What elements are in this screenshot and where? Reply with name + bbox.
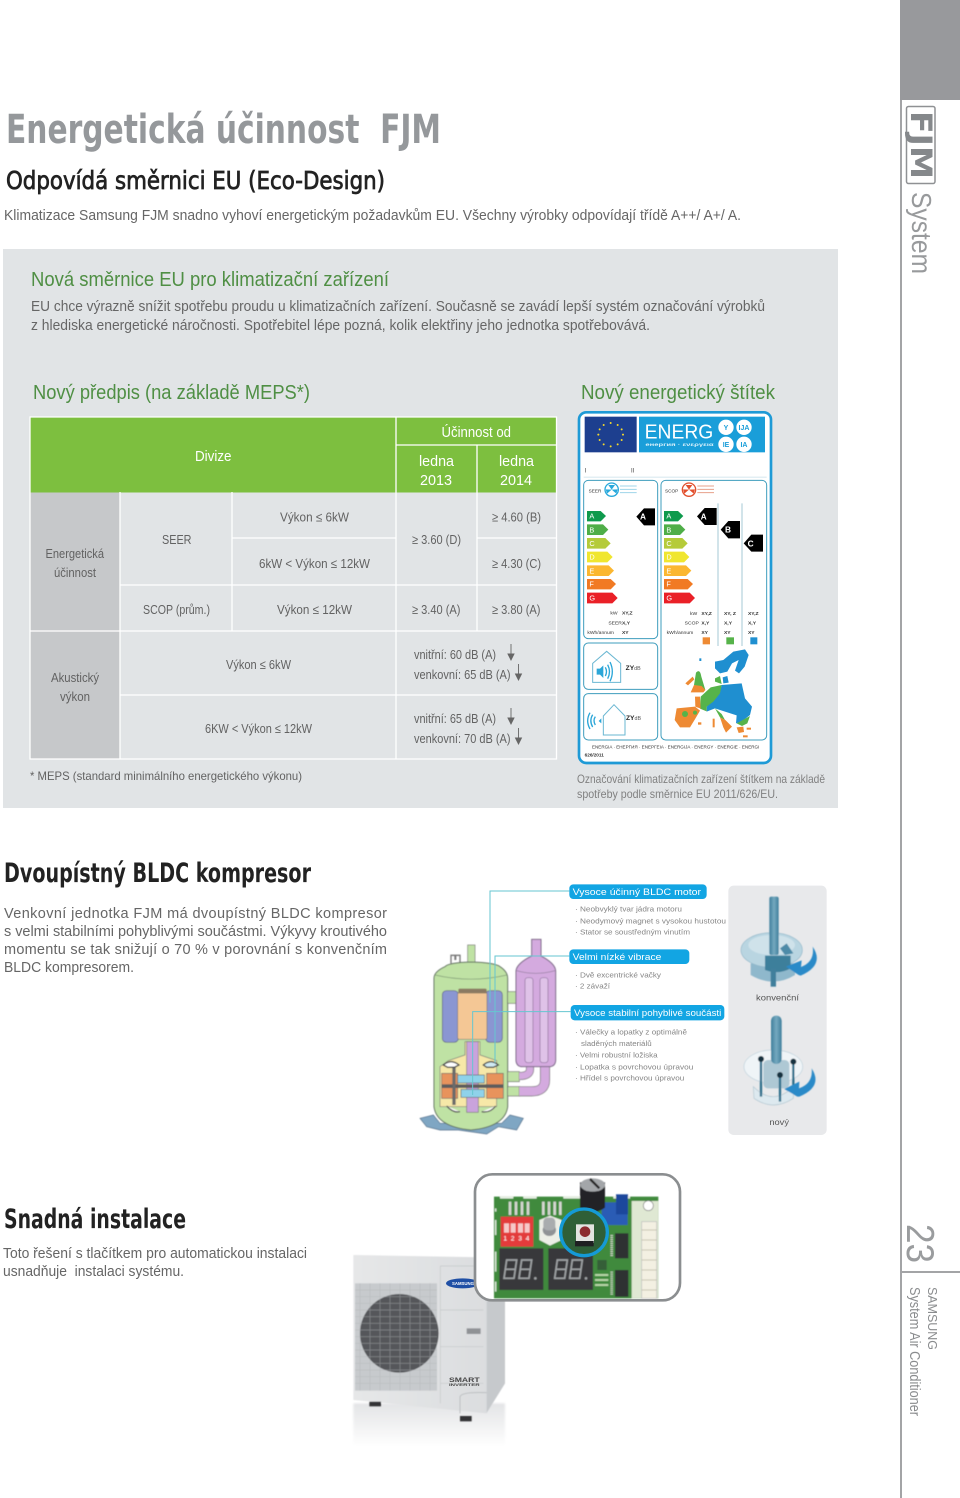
scop header icon: SCOP	[665, 489, 678, 494]
label values: XY, Z	[724, 611, 736, 617]
heading: easy installation: Snadná instalace	[4, 1204, 186, 1235]
scop scale bars: C	[666, 539, 672, 548]
callout: low vibration: · 2 závaží	[575, 982, 611, 991]
table: MEPS requirements: vnitřní: 60 dB (A)	[414, 647, 496, 662]
rating arrows: B	[725, 525, 731, 535]
compressor body text: Venkovní jednotka FJM má dvoupístný BLDC kompresor	[4, 906, 387, 922]
scop scale bars: B	[666, 525, 671, 534]
table: MEPS requirements: ledna	[419, 453, 455, 470]
control board inset: 1 2 3 4	[503, 1236, 530, 1243]
table: MEPS requirements: Akustický	[51, 670, 99, 685]
compressor body text	[4, 906, 387, 976]
callout: low vibration: Velmi nízké vibrace	[573, 952, 661, 962]
table: MEPS requirements: 2013	[420, 472, 452, 489]
label footer: ENERGIA · ЕНЕРГИЯ · ΕΝΕΡΓΕΙΑ · ENERGIJA · ENERGY · ENERGIE · ENERGI	[592, 744, 759, 750]
label values: X,Y	[622, 621, 631, 627]
callout: stable moving parts: · Velmi robustní ložiska	[575, 1050, 658, 1059]
label values: kW	[690, 611, 697, 617]
table: MEPS requirements: venkovní: 65 dB (A)	[414, 667, 510, 682]
label values: X,Y	[724, 621, 733, 627]
table: MEPS requirements: výkon	[60, 689, 90, 704]
caption: energy label: Označování klimatizačních zařízení štítkem na základě	[577, 772, 825, 786]
compressor body text: s velmi stabilními pohyblivými součástmi. Výkyvy kroutivého	[4, 924, 387, 940]
heading: BLDC compressor: Dvoupístný BLDC kompresor	[4, 858, 311, 889]
callout: BLDC motor: · Stator se soustředným vinutím	[575, 927, 690, 936]
table: MEPS requirements: ≥ 3.60 (D)	[412, 532, 461, 547]
seer scale bars: A	[589, 512, 594, 521]
sidebar	[898, 0, 960, 1498]
label footer	[585, 744, 759, 758]
table: MEPS requirements: Výkon ≤ 6kW	[280, 510, 350, 524]
energy banner: енергия · ενεργεια	[645, 442, 715, 448]
installation body text: Toto řešení s tlačítkem pro automatickou instalaci	[3, 1246, 307, 1262]
scop scale bars	[664, 511, 695, 603]
label values: X,Y	[701, 621, 710, 627]
label values: XY,Z	[622, 611, 633, 617]
callout: stable moving parts	[571, 1005, 724, 1083]
scop header icon	[665, 483, 714, 496]
seer scale bars: C	[589, 539, 595, 548]
table: MEPS requirements: ≥ 4.60 (B)	[492, 510, 541, 524]
caption: energy label: spotřeby podle směrnice EU 2011/626/EU.	[577, 787, 778, 801]
callout: low vibration	[569, 949, 689, 991]
seer scale bars	[587, 511, 618, 603]
label values: kWh/annum	[587, 630, 614, 636]
callout: stable moving parts: sladěných materiálů	[581, 1039, 652, 1048]
energy banner: IJA	[739, 425, 749, 432]
samsung logo	[446, 1278, 479, 1288]
table: MEPS requirements: ≥ 3.40 (A)	[412, 602, 460, 617]
label values: X,Y	[748, 621, 757, 627]
icon: new rotor	[744, 1016, 815, 1105]
callout: stable moving parts: Vysoce stabilní pohyblivé součásti	[574, 1008, 721, 1018]
callout: BLDC motor	[569, 884, 726, 936]
heading: MEPS regulation: Nový předpis (na základě MEPS*)	[33, 382, 310, 404]
icon: outdoor noise house	[588, 705, 641, 735]
highlighted auto-install button	[561, 1209, 607, 1256]
label values: SEER	[608, 621, 622, 627]
icon: outdoor noise house: ZYdB	[626, 715, 641, 722]
callout: BLDC motor: · Neobvyklý tvar jádra motoru	[575, 905, 682, 914]
caption: energy label	[577, 772, 825, 801]
sidebar: 23	[898, 1224, 941, 1263]
callout: stable moving parts: · Válečky a lopatky z optimálně	[575, 1028, 687, 1037]
sidebar: SAMSUNG	[925, 1287, 940, 1350]
panel: EU directive background	[3, 249, 838, 808]
callout: stable moving parts: · Hřídel s povrchovou úpravou	[575, 1074, 684, 1083]
table: MEPS requirements: SCOP (prům.)	[143, 602, 210, 617]
samsung logo: SAMSUNG	[452, 1281, 474, 1287]
seer scale bars: G	[589, 594, 595, 603]
rating arrows: A	[640, 512, 646, 522]
label: new: nový	[769, 1117, 790, 1127]
seer header icon: SEER	[589, 489, 601, 494]
table: MEPS requirements: Výkon ≤ 6kW	[226, 657, 292, 672]
outdoor unit photo	[353, 1255, 505, 1447]
rating arrows: A	[701, 511, 707, 521]
seer scale bars: B	[589, 525, 594, 534]
sidebar: FJM	[904, 111, 938, 179]
label: conventional: konvenční	[756, 993, 800, 1003]
energy label illustration: II	[631, 469, 635, 475]
label values: XY	[701, 630, 709, 636]
heading: new directive: Nová směrnice EU pro klimatizační zařízení	[31, 269, 389, 291]
table: MEPS requirements: 6KW < Výkon ≤ 12kW	[205, 721, 313, 736]
directive body text: z hlediska energetické náročnosti. Spotřebitel lépe pozná, kolik elektřiny jeho jednotka spotřebovává.	[31, 318, 650, 334]
scop scale bars: F	[666, 580, 671, 589]
table: MEPS requirements: Divize	[195, 448, 232, 465]
directive body text: EU chce výrazně snížit spotřebu proudu u klimatizačních zařízení. Současně se zavádí lepší systém označování výrobků	[31, 299, 765, 315]
directive body text	[31, 299, 765, 334]
panel: rotor comparison	[728, 886, 827, 1135]
scop scale bars: E	[666, 566, 671, 575]
label values: SCOP	[685, 621, 699, 627]
table: MEPS requirements: SEER	[162, 532, 192, 547]
label values: XY	[622, 630, 629, 636]
heading: energy label: Nový energetický štítek	[581, 382, 776, 404]
scop scale bars: D	[666, 553, 672, 562]
installation body text: usnadňuje instalaci systému.	[3, 1264, 184, 1280]
label values: XY,Z	[748, 611, 759, 617]
seer scale bars: F	[589, 580, 594, 589]
table: MEPS requirements: vnitřní: 65 dB (A)	[414, 711, 496, 726]
seer header icon	[589, 483, 637, 496]
sidebar: System	[906, 192, 937, 274]
table: MEPS requirements: Účinnost od	[442, 424, 511, 441]
energy banner	[639, 417, 765, 452]
label footer: 626/2011	[585, 753, 604, 758]
callout: BLDC motor: · Neodymový magnet s vysokou hustotou	[575, 916, 726, 925]
title: Energetická účinnost FJM	[6, 107, 441, 153]
scop scale bars: G	[666, 594, 672, 603]
compressor body text: BLDC kompresorem.	[4, 960, 134, 976]
energy label illustration	[579, 412, 771, 763]
energy label illustration: I	[585, 469, 587, 475]
icon: indoor noise house	[593, 651, 641, 682]
panels	[584, 480, 767, 740]
rating arrows	[636, 508, 763, 552]
seer scale bars: E	[589, 566, 594, 575]
table: MEPS requirements: 6kW < Výkon ≤ 12kW	[259, 556, 371, 571]
label values	[587, 611, 759, 636]
smart inverter logo: INVERTER	[449, 1383, 480, 1387]
label values: XY	[748, 630, 755, 636]
label values: XY,Z	[701, 611, 712, 617]
table: MEPS requirements: venkovní: 70 dB (A)	[414, 731, 510, 746]
leader lines	[473, 891, 571, 1095]
icon: indoor noise house: ZYdB	[626, 665, 641, 672]
accumulator illustration	[516, 939, 556, 1091]
table: MEPS requirements: ≥ 3.80 (A)	[492, 602, 540, 617]
callout: stable moving parts: · Lopatka s povrchovou úpravou	[575, 1062, 693, 1071]
installation body text	[3, 1246, 307, 1280]
callout: BLDC motor: Vysoce účinný BLDC motor	[573, 887, 701, 897]
callout: low vibration: · Dvě excentrické vačky	[575, 970, 661, 979]
rating arrows: C	[748, 538, 754, 548]
subtitle: Odpovídá směrnici EU (Eco-Design)	[6, 166, 385, 195]
label values: kWh/annum	[667, 630, 693, 636]
map of Europe	[675, 649, 752, 737]
energy banner: Y	[724, 425, 729, 432]
table: MEPS requirements: Výkon ≤ 12kW	[277, 602, 353, 617]
smart inverter logo: SMART	[449, 1378, 480, 1384]
footnote: * MEPS (standard minimálního energetického výkonu)	[30, 769, 302, 783]
seer scale bars: D	[589, 553, 595, 562]
icon: EU flag	[585, 417, 637, 452]
energy banner: ENERG	[645, 420, 713, 443]
energy banner: IA	[740, 442, 747, 449]
compressor body text: momentu se tak snižují o 70 % v porovnání s konvenčním	[4, 942, 387, 958]
intro text: Klimatizace Samsung FJM snadno vyhoví energetickým požadavkům EU. Všechny výrobky odpovídají třídě A++/ A+/ A.	[4, 208, 741, 224]
control board inset	[475, 1174, 680, 1300]
compressor illustration	[420, 945, 524, 1134]
table: MEPS requirements: 2014	[500, 472, 532, 489]
table: MEPS requirements	[30, 417, 556, 759]
compressor callouts	[473, 884, 726, 1095]
label values: kW	[610, 611, 618, 617]
sidebar: System Air Conditioner	[906, 1287, 922, 1416]
table: MEPS requirements: účinnost	[54, 565, 96, 580]
table: MEPS requirements: ≥ 4.30 (C)	[492, 556, 541, 571]
label values: XY	[724, 630, 731, 636]
table: MEPS requirements: ledna	[499, 453, 535, 470]
table: MEPS requirements: Energetická	[46, 546, 105, 561]
scop scale bars: A	[666, 512, 671, 521]
energy banner: IE	[723, 442, 730, 449]
smart inverter logo	[449, 1378, 480, 1387]
icon: conventional rotor	[741, 897, 817, 987]
